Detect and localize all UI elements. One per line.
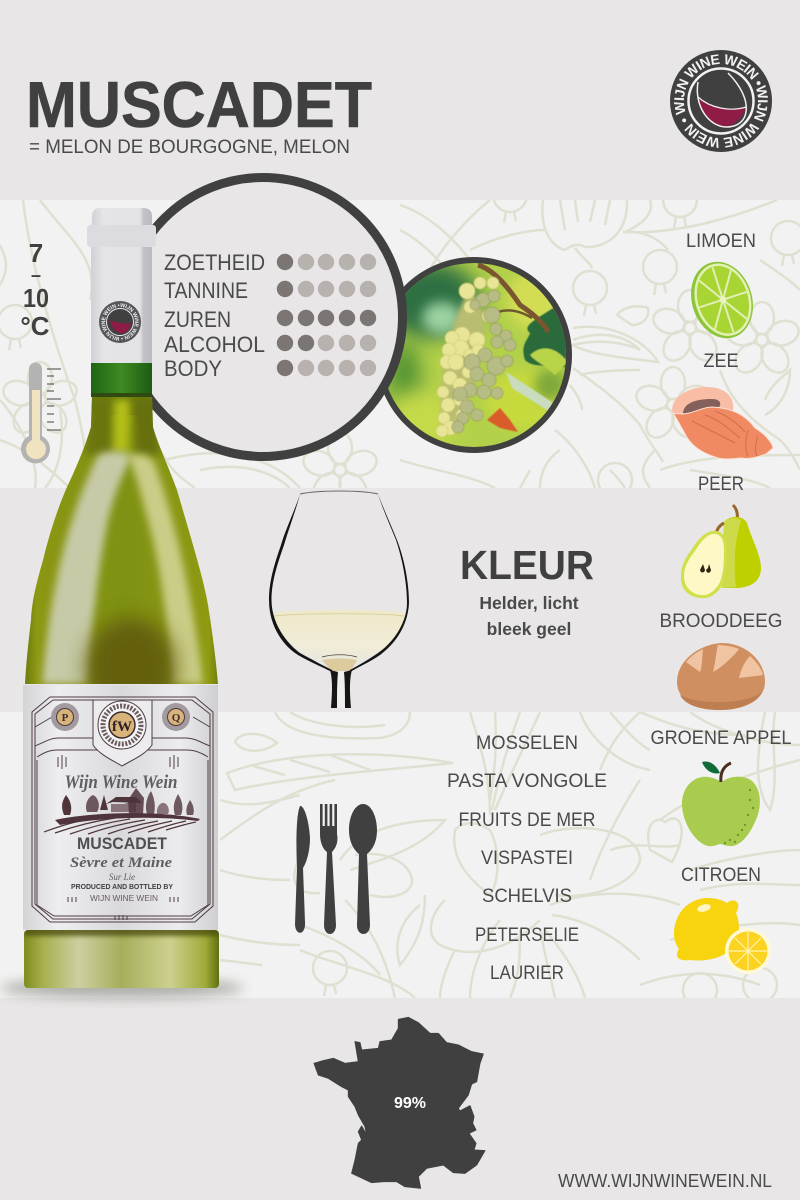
- subtitle: synonyms: = MELON DE BOURGOGNE, MELON: [29, 137, 350, 158]
- label village illustration: [55, 788, 200, 825]
- spoon: [349, 804, 377, 934]
- grape photo circle: [376, 257, 575, 453]
- label frame: [32, 697, 213, 922]
- medallion FW: [98, 701, 146, 749]
- medallion FW: fW: [112, 719, 132, 735]
- serving temperature: 10: [23, 283, 49, 313]
- icon: cutlery: [295, 804, 377, 934]
- aroma label: limoen: LIMOEN: [686, 231, 756, 252]
- serving temperature: °C: [20, 311, 50, 341]
- label producer line: PRODUCED AND BOTTLED BY: [71, 884, 173, 891]
- colour description: [479, 593, 579, 639]
- medallion P: P: [62, 712, 69, 724]
- medallion Q: Q: [172, 712, 181, 724]
- label wine name: MUSCADET: [77, 834, 168, 853]
- taste labels: ZUREN: [164, 307, 231, 332]
- map: france with share: [314, 1017, 485, 1188]
- icon: green apple: [682, 762, 760, 846]
- medallion Q: [162, 703, 190, 731]
- serving temperature: [20, 238, 50, 341]
- knife: [295, 806, 310, 933]
- taste labels: ALCOHOL: [164, 332, 265, 357]
- bottle: [0, 208, 246, 1004]
- taste labels: TANNINE: [164, 278, 248, 303]
- taste labels: ZOETHEID: [164, 250, 265, 275]
- serving temperature: –: [31, 265, 41, 285]
- icon: pears: [681, 505, 761, 598]
- aroma label: groene appel: GROENE APPEL: [650, 728, 792, 749]
- bottle shadow: [0, 978, 244, 998]
- taste labels: [164, 250, 265, 381]
- panel: food pairing band with floral pattern: [0, 712, 800, 1018]
- bottle lower glass: [24, 926, 219, 988]
- taste rating dots: [277, 254, 376, 376]
- aroma label: zee: ZEE: [704, 351, 738, 372]
- serving temperature: 7: [29, 238, 43, 268]
- food pairing list: LAURIER: [490, 963, 564, 984]
- fork: [320, 804, 337, 934]
- icon: sea shell: [672, 387, 773, 459]
- colour description: Helder, licht: [479, 593, 579, 613]
- icon: lemons: [674, 898, 771, 974]
- label vineyard rows: [44, 817, 196, 834]
- food pairing list: VISPASTEI: [481, 848, 573, 869]
- food pairing list: PETERSELIE: [475, 925, 579, 946]
- food pairing list: MOSSELEN: [476, 733, 578, 754]
- panel: aroma band with floral pattern: [0, 200, 800, 488]
- bottle glass body: [25, 397, 218, 684]
- label shield: [93, 700, 152, 766]
- icon: lime: [681, 254, 763, 346]
- glass stem: [330, 670, 352, 708]
- food pairing list: PASTA VONGOLE: [447, 771, 607, 792]
- aroma label: brooddeeg: BROODDEEG: [660, 611, 782, 632]
- white wine in glass: [272, 610, 406, 663]
- panel: taste profile circle: [124, 178, 402, 456]
- glass outline: [269, 494, 332, 672]
- capsule logo: WIJN WINE WEIN • WIJN WINE WEIN •: [101, 303, 139, 341]
- green neck band: [91, 363, 152, 396]
- label script name: Wijn Wine Wein: [64, 772, 178, 793]
- icon: wijn wine wein logo: WIJN WINE WEIN • WIJN WINE WEIN •: [674, 54, 768, 148]
- aroma label: citroen: CITROEN: [681, 865, 761, 886]
- white capsule: [87, 208, 156, 363]
- taste labels: BODY: [164, 356, 222, 381]
- website url: WWW.WIJNWINEWEIN.NL: [558, 1171, 772, 1191]
- food pairing list: SCHELVIS: [482, 886, 572, 907]
- medallion P: [51, 703, 79, 731]
- food pairing list: [447, 733, 607, 984]
- wine label: [23, 685, 218, 930]
- colour description: bleek geel: [487, 619, 571, 639]
- icon: bread: [677, 643, 765, 710]
- map: france with share: 99%: [394, 1095, 426, 1112]
- wine surface shadow: [274, 614, 404, 616]
- colour heading: KLEUR: [460, 542, 594, 588]
- food pairing list: FRUITS DE MER: [458, 810, 596, 831]
- wine glass: [269, 491, 409, 708]
- label sur lie: Sur Lie: [109, 872, 135, 882]
- label appellation: Sèvre et Maine: [70, 855, 172, 871]
- title: MUSCADET: [26, 68, 372, 141]
- glass base glow: [322, 658, 357, 672]
- icon: thermometer: [21, 363, 61, 463]
- aroma label: peer: PEER: [698, 474, 744, 495]
- label producer name: WIJN WINE WEIN: [90, 894, 158, 903]
